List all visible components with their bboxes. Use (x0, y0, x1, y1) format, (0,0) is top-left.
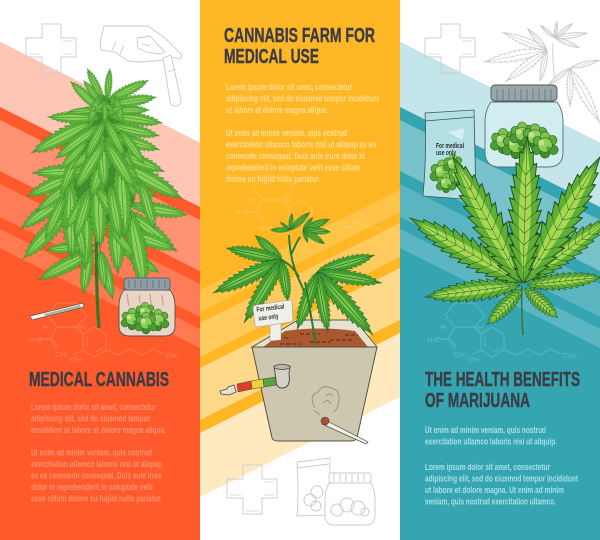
icon: medical cross outline (26, 24, 76, 73)
text block: right body: Ut enim ad minim veniam, quis nostrud (425, 425, 546, 436)
rasta pipe (220, 364, 290, 395)
icon: bag and jar outline (297, 458, 375, 525)
text block: left body: esse cillum dolore eu fugiat nulla pariatur. (31, 494, 162, 504)
glass jar with buds (485, 85, 563, 167)
text block: middle body: adipiscing elit, sed do eiusmod tempor incididunt (226, 94, 380, 104)
cannabis cola plant (15, 66, 189, 302)
heading: cannabis farm: CANNABIS FARM FOR (224, 25, 375, 47)
plant sign: for medical use only: use only (258, 313, 279, 323)
molecule (29, 303, 179, 364)
heading: health benefits: OF MARIJUANA (425, 390, 530, 412)
heading: cannabis farm: MEDICAL USE (224, 46, 319, 68)
text block: left body: incididunt ut labore et dolore magna aliqua. (31, 425, 166, 436)
molecule (235, 176, 385, 237)
text block: left body: exercitation ullamco laboris nisi ut aliquip (31, 459, 162, 470)
text block: middle body: commodo consequat. Duis aute irure dolor in (226, 151, 365, 162)
square plant pot (252, 320, 377, 441)
text block: middle body: exercitation ullamco laboris nisi ut aliquip ex ea (226, 140, 376, 150)
text block: left body: Lorem ipsum dolor sit amet, consectetur (31, 402, 156, 413)
smoke (312, 387, 339, 415)
text block: left body (31, 402, 166, 504)
text block: left body: adipiscing elit, sed do eiusmod tempor (31, 414, 150, 424)
icon: medical cross outline (425, 24, 475, 73)
lit joint (321, 417, 368, 444)
icon: medical cross outline (227, 465, 277, 514)
text block: left body: dolor in reprehenderit in voluptate velit (31, 482, 154, 493)
zip bag with buds: use only (436, 150, 456, 157)
text block: right body (425, 425, 579, 508)
glass jar with buds (119, 278, 175, 336)
zip bag with buds: For medical (436, 143, 464, 150)
text block: middle body (226, 82, 380, 185)
large cannabis leaf (403, 137, 600, 335)
plant sign: for medical use only (253, 300, 293, 341)
heading: cannabis farm (224, 25, 375, 68)
cannabis plant stem (96, 190, 99, 328)
text block: middle body: reprehenderit in voluptate velit esse cillum (226, 162, 360, 174)
heading: health benefits (425, 369, 580, 412)
text block: left body: Ut enim ad minim veniam, quis nostrud (31, 448, 152, 458)
panel: cannabis farm (200, 0, 400, 540)
panel: health benefits (400, 0, 600, 540)
text block: middle body: ut labore et dolore magna aliqua. (226, 105, 328, 116)
molecule (427, 303, 577, 364)
plant outline sketch (482, 21, 600, 126)
heading: medical cannabis: MEDICAL CANNABIS (29, 369, 169, 391)
zip bag with buds (423, 110, 476, 200)
text block: left body: ex ea commodo consequat. Duis aute irure (31, 470, 162, 482)
joint (30, 303, 84, 320)
text block: middle body: dolore eu fugiat nulla pariatur. (226, 174, 320, 185)
icon: gloved hand holding test tube (100, 26, 182, 106)
panel: medical cannabis (0, 0, 200, 540)
text block: middle body: Ut enim ad minim veniam, quis nostrud (226, 128, 347, 139)
potted cannabis plant leaves (209, 209, 383, 345)
plant sign: for medical use only: For medical (256, 303, 285, 314)
front leaves of potted plant (290, 266, 380, 345)
text block: middle body: Lorem ipsum dolor sit amet, consectetur (226, 82, 352, 93)
